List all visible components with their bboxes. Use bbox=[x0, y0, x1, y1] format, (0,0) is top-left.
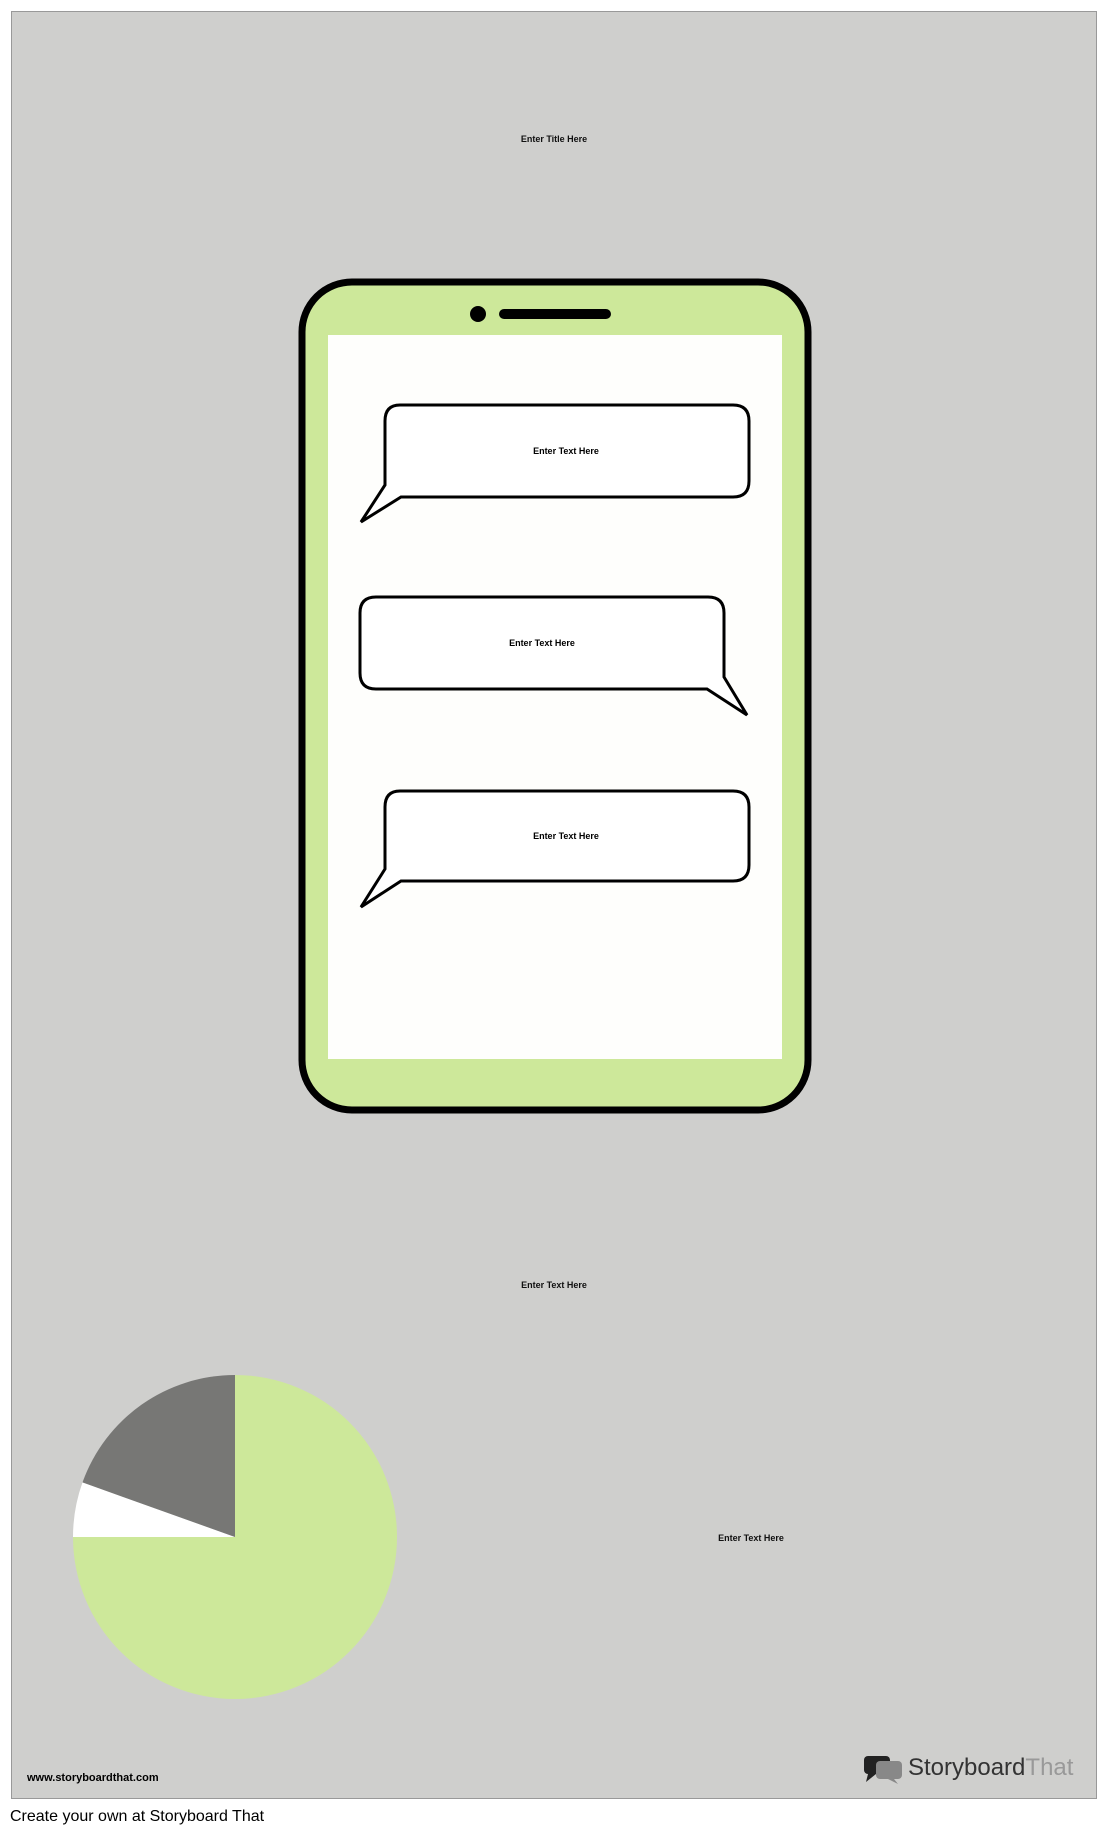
footer caption: Create your own at Storyboard That bbox=[10, 1808, 264, 1825]
speech bubble 1: Enter Text Here bbox=[533, 446, 599, 456]
speech bubble 2 bbox=[360, 597, 747, 715]
phone body bbox=[302, 282, 808, 1110]
logo: StoryboardThat bbox=[908, 1754, 1073, 1781]
speech bubble 2: Enter Text Here bbox=[509, 638, 575, 648]
pie chart bbox=[73, 1375, 397, 1699]
speech bubble 1 bbox=[361, 405, 749, 522]
footer url: www.storyboardthat.com bbox=[27, 1772, 159, 1784]
text block middle: Enter Text Here bbox=[521, 1280, 587, 1290]
speech bubble 3 bbox=[361, 791, 749, 907]
title: Enter Title Here bbox=[521, 134, 587, 144]
text block right of pie: Enter Text Here bbox=[718, 1533, 784, 1543]
speech bubble 3: Enter Text Here bbox=[533, 831, 599, 841]
